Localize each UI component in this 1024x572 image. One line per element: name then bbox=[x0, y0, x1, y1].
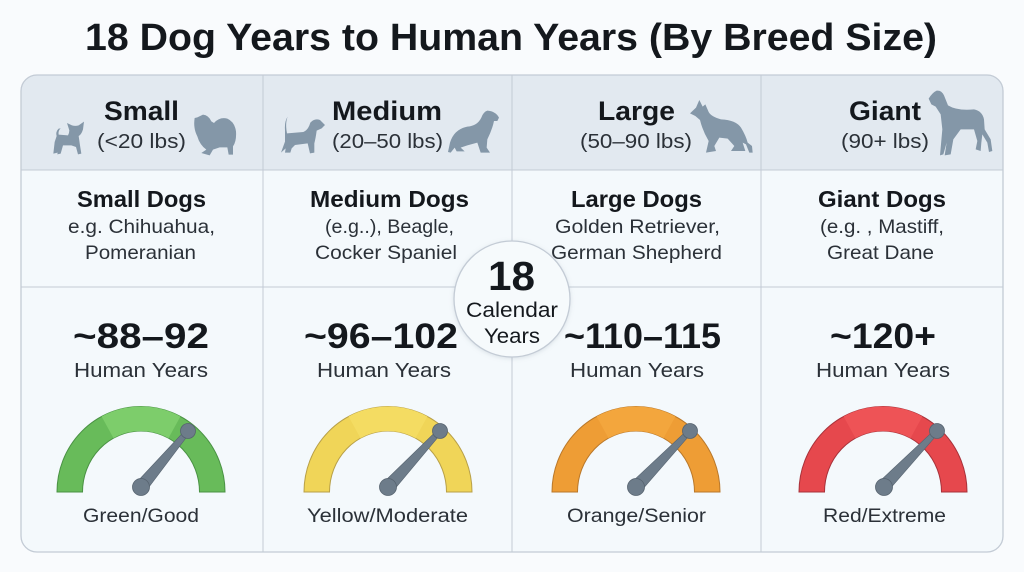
panel: giant dogs column bbox=[799, 91, 992, 527]
callout: 18 calendar years: Years bbox=[484, 325, 540, 348]
value: small: ~88–92 bbox=[73, 317, 209, 356]
panel: comparison table frame bbox=[21, 75, 1003, 552]
breed examples: giant: Great Dane bbox=[827, 242, 934, 264]
breed examples: medium: Cocker Spaniel bbox=[315, 242, 457, 264]
breed examples: small: e.g. Chihuahua, bbox=[68, 216, 215, 238]
breed examples: large: Golden Retriever, bbox=[555, 216, 720, 238]
weight: giant: (90+ lbs) bbox=[841, 131, 929, 153]
breed examples: small bbox=[68, 216, 215, 264]
callout: 18 calendar years: 18 bbox=[488, 253, 535, 299]
panel: large dogs column bbox=[551, 96, 753, 527]
breed title: giant: Giant Dogs bbox=[818, 186, 946, 212]
breed title: large: Large Dogs bbox=[571, 186, 702, 212]
callout: 18 calendar years bbox=[454, 241, 570, 357]
breed examples: large: German Shepherd bbox=[551, 242, 722, 264]
heading: small: Small bbox=[104, 96, 179, 126]
breed examples: giant bbox=[820, 216, 944, 264]
panel: small dogs column bbox=[53, 96, 236, 527]
gauge: green bbox=[57, 406, 225, 496]
gauge: orange bbox=[552, 406, 720, 496]
unit: large: Human Years bbox=[570, 360, 704, 382]
icon: retriever bbox=[448, 111, 499, 153]
breed examples: giant: (e.g. , Mastiff, bbox=[820, 216, 944, 238]
weight: medium: (20–50 lbs) bbox=[332, 131, 443, 153]
gauge label: red: Red/Extreme bbox=[823, 506, 946, 527]
gauge label: green: Green/Good bbox=[83, 506, 199, 527]
breed examples: small: Pomeranian bbox=[85, 242, 196, 264]
panel: medium dogs column bbox=[281, 96, 499, 527]
weight: large: (50–90 lbs) bbox=[580, 131, 692, 153]
callout: 18 calendar years: Calendar bbox=[466, 299, 558, 322]
heading: large: Large bbox=[598, 96, 675, 126]
breed title: small: Small Dogs bbox=[77, 186, 206, 212]
weight: small: (<20 lbs) bbox=[97, 131, 186, 153]
gauge label: orange: Orange/Senior bbox=[567, 506, 707, 527]
unit: small: Human Years bbox=[74, 360, 208, 382]
icon: chihuahua bbox=[53, 122, 84, 154]
icon: beagle bbox=[281, 117, 325, 153]
breed examples: large bbox=[551, 216, 722, 264]
unit: giant: Human Years bbox=[816, 360, 950, 382]
unit: medium: Human Years bbox=[317, 360, 451, 382]
value: giant: ~120+ bbox=[830, 317, 936, 356]
breed examples: medium: (e.g..), Beagle, bbox=[325, 216, 454, 238]
value: medium: ~96–102 bbox=[304, 317, 458, 356]
breed title: medium: Medium Dogs bbox=[310, 186, 469, 212]
heading: giant: Giant bbox=[849, 96, 921, 126]
breed examples: medium bbox=[315, 216, 457, 264]
icon: german shepherd bbox=[690, 100, 753, 153]
value: large: ~110–115 bbox=[564, 317, 721, 356]
icon: great dane bbox=[929, 91, 992, 155]
icon: pomeranian bbox=[194, 115, 236, 155]
heading: medium: Medium bbox=[332, 96, 442, 126]
gauge label: yellow: Yellow/Moderate bbox=[307, 506, 468, 527]
gauge: yellow bbox=[304, 406, 472, 496]
title: 18 Dog Years to Human Years (By Breed Size) bbox=[85, 17, 937, 59]
gauge: red bbox=[799, 406, 967, 496]
